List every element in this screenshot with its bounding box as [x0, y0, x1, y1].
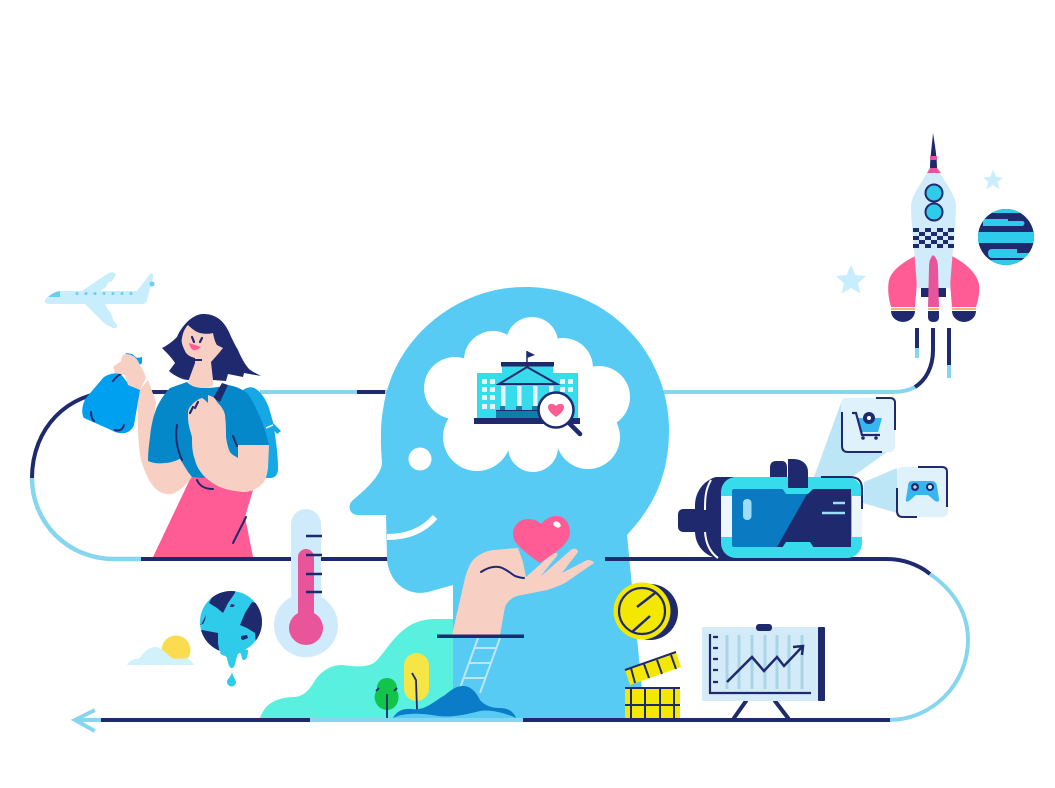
hand holding heart — [437, 516, 594, 638]
ladder — [460, 638, 500, 693]
heart — [513, 516, 570, 563]
water mound — [393, 686, 516, 718]
small star — [983, 170, 1003, 189]
hair — [162, 314, 261, 381]
t-shirt — [148, 382, 269, 478]
backpack — [243, 387, 278, 478]
head silhouette — [350, 287, 669, 720]
engine rims — [891, 308, 976, 310]
eye — [408, 448, 432, 470]
smile — [387, 517, 435, 537]
exhaust trails — [917, 328, 949, 365]
portholes — [926, 184, 942, 202]
sun behind cloud — [127, 636, 194, 665]
yellow tree — [404, 653, 429, 701]
thermometer — [274, 509, 338, 657]
large star — [836, 265, 866, 294]
far arm — [138, 380, 192, 494]
open yellow box — [625, 652, 681, 718]
rocket — [888, 133, 979, 378]
hand holding bag — [113, 354, 146, 390]
heart stand line — [437, 634, 524, 638]
melting earth — [200, 591, 262, 686]
shopping card — [841, 398, 895, 452]
projection cones — [814, 400, 897, 513]
journey path in front — [76, 559, 968, 720]
university building with magnifier — [474, 351, 580, 434]
striped planet — [978, 209, 1034, 265]
spire — [930, 133, 937, 173]
infographic illustration — [30, 133, 1034, 733]
woman with bag and backpack — [82, 314, 281, 557]
presentation board chart — [702, 624, 825, 718]
fins — [888, 256, 917, 307]
arrowhead — [75, 711, 93, 730]
neck and face — [182, 325, 223, 388]
journey path behind the figures — [32, 328, 933, 559]
dress — [153, 470, 253, 557]
body — [911, 173, 956, 288]
checker band — [913, 228, 954, 248]
game card — [897, 467, 948, 517]
green tree — [375, 678, 399, 710]
bag — [82, 373, 140, 433]
airplane — [45, 272, 154, 328]
hill landscape — [260, 619, 453, 720]
thought cloud — [424, 317, 630, 472]
gold coin — [614, 582, 678, 640]
vr headset — [678, 459, 862, 558]
bent arm — [188, 395, 269, 492]
